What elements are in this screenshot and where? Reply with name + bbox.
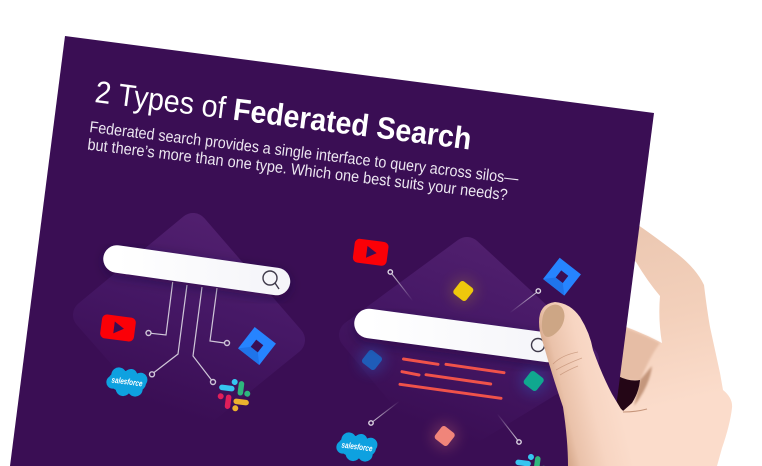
icon: pink tile	[431, 422, 459, 450]
icon: magnifier	[263, 271, 279, 289]
icon: thumbnail	[542, 304, 564, 337]
icon: blue tile	[358, 346, 386, 374]
paper sheet	[10, 36, 654, 466]
icon: slack two	[515, 452, 548, 466]
results text lines	[400, 359, 504, 398]
icon: salesforce two: salesforce	[341, 440, 373, 453]
hand: fingers behind the sheet	[560, 222, 732, 466]
hand: thumb over the sheet	[539, 302, 660, 466]
subtitle text block: but there’s more than one type. Which one best suits your needs?	[87, 137, 509, 204]
panel: diagram two background diamond	[354, 252, 584, 445]
icon: salesforce one: salesforce	[111, 375, 143, 388]
icon: yellow tile	[449, 277, 477, 305]
icon: youtube one	[100, 314, 136, 342]
icon: jira two	[543, 258, 581, 296]
subtitle text block: Federated search provides a single interface to query across silos—	[89, 119, 519, 188]
icon: teal tile	[520, 367, 548, 395]
title: 2 Types of Federated Search	[93, 74, 474, 156]
icon: salesforce two	[335, 431, 379, 464]
search bar: diagram two	[369, 324, 548, 352]
icon: jira one	[238, 327, 276, 365]
icon: salesforce one	[105, 366, 149, 399]
icon: slack one	[216, 377, 252, 413]
connector lines: diagram one	[146, 282, 230, 384]
search bar: diagram one	[117, 259, 279, 289]
icon: youtube two	[352, 238, 389, 266]
connector pins: diagram two	[369, 270, 540, 444]
panel: diagram one background diamond	[88, 228, 290, 425]
icon: magnifier partly hidden	[532, 338, 544, 352]
